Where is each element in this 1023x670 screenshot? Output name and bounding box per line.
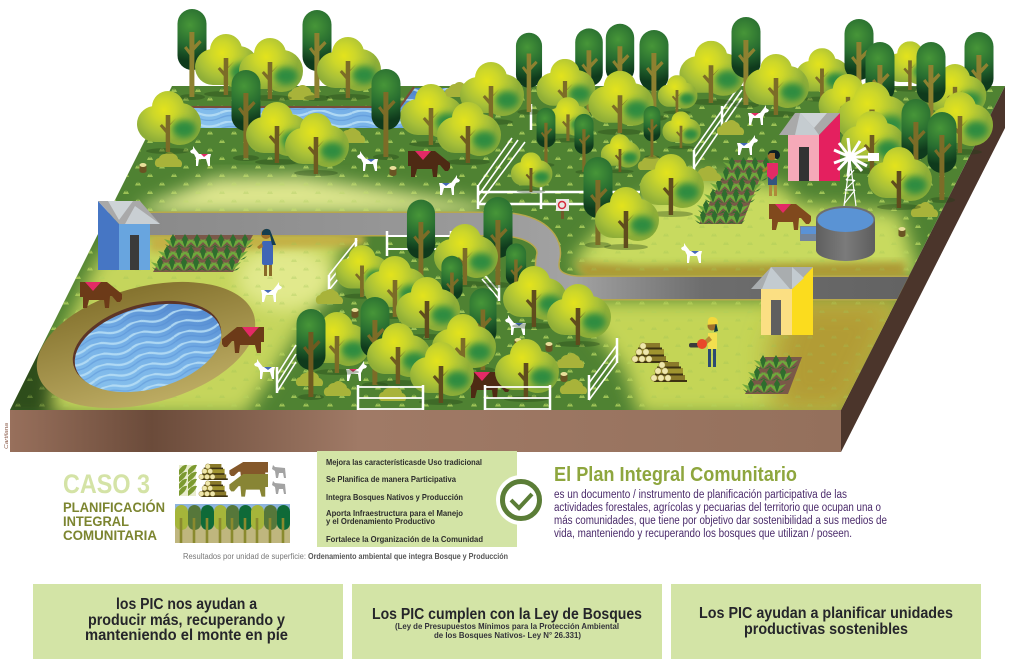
cows bbox=[80, 151, 811, 353]
description text: actividades forestales, agrícolas y pecuarias del territorio que ocupan una o bbox=[554, 502, 881, 514]
river bbox=[185, 87, 452, 128]
water tank bbox=[800, 206, 875, 261]
panel: results list: Integra Bosques Nativos y Producción bbox=[326, 493, 463, 502]
icon: logs bbox=[199, 464, 228, 497]
pond with tan shore bbox=[36, 282, 256, 408]
icon: production summary bbox=[175, 462, 290, 543]
panel: results list: Se Planifica de manera Participativa bbox=[326, 475, 456, 484]
blue house bbox=[98, 201, 160, 270]
results caption: Resultados por unidad de superficie: bbox=[183, 552, 306, 561]
terrain block sides bbox=[4, 86, 1005, 452]
icon: crops bbox=[179, 465, 197, 496]
cow behind front fence bbox=[468, 372, 510, 398]
case number: CASO 3 bbox=[63, 469, 150, 499]
crop plot near logs bbox=[742, 355, 802, 394]
woman in blue bbox=[257, 229, 276, 276]
forest: back trees bbox=[128, 9, 1000, 176]
case title: COMUNITARIA bbox=[63, 528, 157, 543]
panel: producir más: producir más, recuperando y bbox=[88, 612, 285, 629]
yellow house bbox=[751, 267, 813, 335]
warning sign bbox=[556, 199, 569, 219]
results caption bbox=[183, 552, 508, 561]
panel: results list: Aporta Infraestructura para el Manejo bbox=[326, 509, 463, 518]
bushes, stumps, sign, front bbox=[296, 199, 587, 401]
terrain top: ground and meadows bbox=[0, 80, 1023, 420]
author credit: Cartilana bbox=[4, 423, 10, 449]
cow: dark, upper left bbox=[408, 151, 450, 177]
case title bbox=[63, 500, 165, 543]
panel: results list: y el Ordenamiento Productivo bbox=[326, 517, 435, 526]
icon: forest strip bbox=[175, 504, 290, 543]
cow: right, near tank bbox=[769, 204, 811, 230]
panel: ley de bosques: de los Bosques Nativos- Ley N° 26.331) bbox=[434, 631, 581, 640]
stacked logs bbox=[632, 343, 687, 382]
bushes and stumps, back bbox=[140, 82, 938, 237]
panel: unidades productivas: productivas sostenibles bbox=[744, 621, 908, 638]
panel: producir más: los PIC nos ayudan a bbox=[116, 596, 257, 613]
panel: results list bbox=[317, 451, 517, 547]
crop plot near blue house bbox=[151, 234, 254, 272]
description text: más comunidades, que tiene por objetivo dar sostenibilidad a sus medios de bbox=[554, 515, 887, 527]
description text bbox=[554, 489, 887, 540]
panel: results list: Mejora las característicasde Uso tradicional bbox=[326, 458, 482, 467]
pink house bbox=[779, 113, 840, 181]
panel: ley de bosques: Los PIC cumplen con la Ley de Bosques bbox=[372, 606, 642, 623]
icon: cattle bbox=[229, 462, 268, 497]
case title: PLANIFICACIÓN bbox=[63, 500, 165, 515]
panel: producir más bbox=[33, 584, 343, 659]
cow: pond shore bbox=[222, 327, 264, 353]
icon: goats bbox=[272, 465, 286, 494]
front soil face bbox=[10, 410, 841, 452]
forest: front trees bbox=[296, 99, 956, 405]
goats bbox=[190, 105, 769, 381]
road bbox=[148, 224, 920, 288]
crop plots bbox=[151, 157, 802, 394]
right soil face bbox=[841, 86, 1005, 452]
panel: results list: Fortalece la Organización de la Comunidad bbox=[326, 535, 483, 544]
woman in pink bbox=[762, 150, 780, 196]
icon: check mark bbox=[496, 475, 546, 525]
panel: unidades productivas: Los PIC ayudan a planificar unidades bbox=[699, 605, 953, 622]
man with chainsaw bbox=[689, 317, 718, 367]
description text: es un documento / instrumento de planificación participativa de las bbox=[554, 489, 847, 501]
fences bbox=[277, 82, 742, 400]
caso 3 heading bbox=[63, 469, 165, 543]
results caption: Ordenamiento ambiental que integra Bosque y Producción bbox=[308, 552, 508, 561]
description text: vida, manteniendo y recuperando los bosques que utilizan / poseen. bbox=[554, 528, 852, 540]
windmill bbox=[834, 138, 879, 206]
panel: ley de bosques: (Ley de Presupuestos Mínimos para la Protección Ambiental bbox=[395, 622, 619, 631]
foreground fence rails bbox=[358, 385, 550, 410]
crop plot near pink house bbox=[694, 157, 775, 224]
cow: above pond bbox=[80, 282, 122, 308]
panel: ley de bosques bbox=[352, 584, 662, 659]
case title: INTEGRAL bbox=[63, 514, 129, 529]
heading: El Plan Integral Comunitario: El Plan Integral Comunitario bbox=[554, 464, 797, 486]
panel: producir más: manteniendo el monte en pie bbox=[85, 627, 288, 644]
panel: unidades productivas bbox=[671, 584, 981, 659]
